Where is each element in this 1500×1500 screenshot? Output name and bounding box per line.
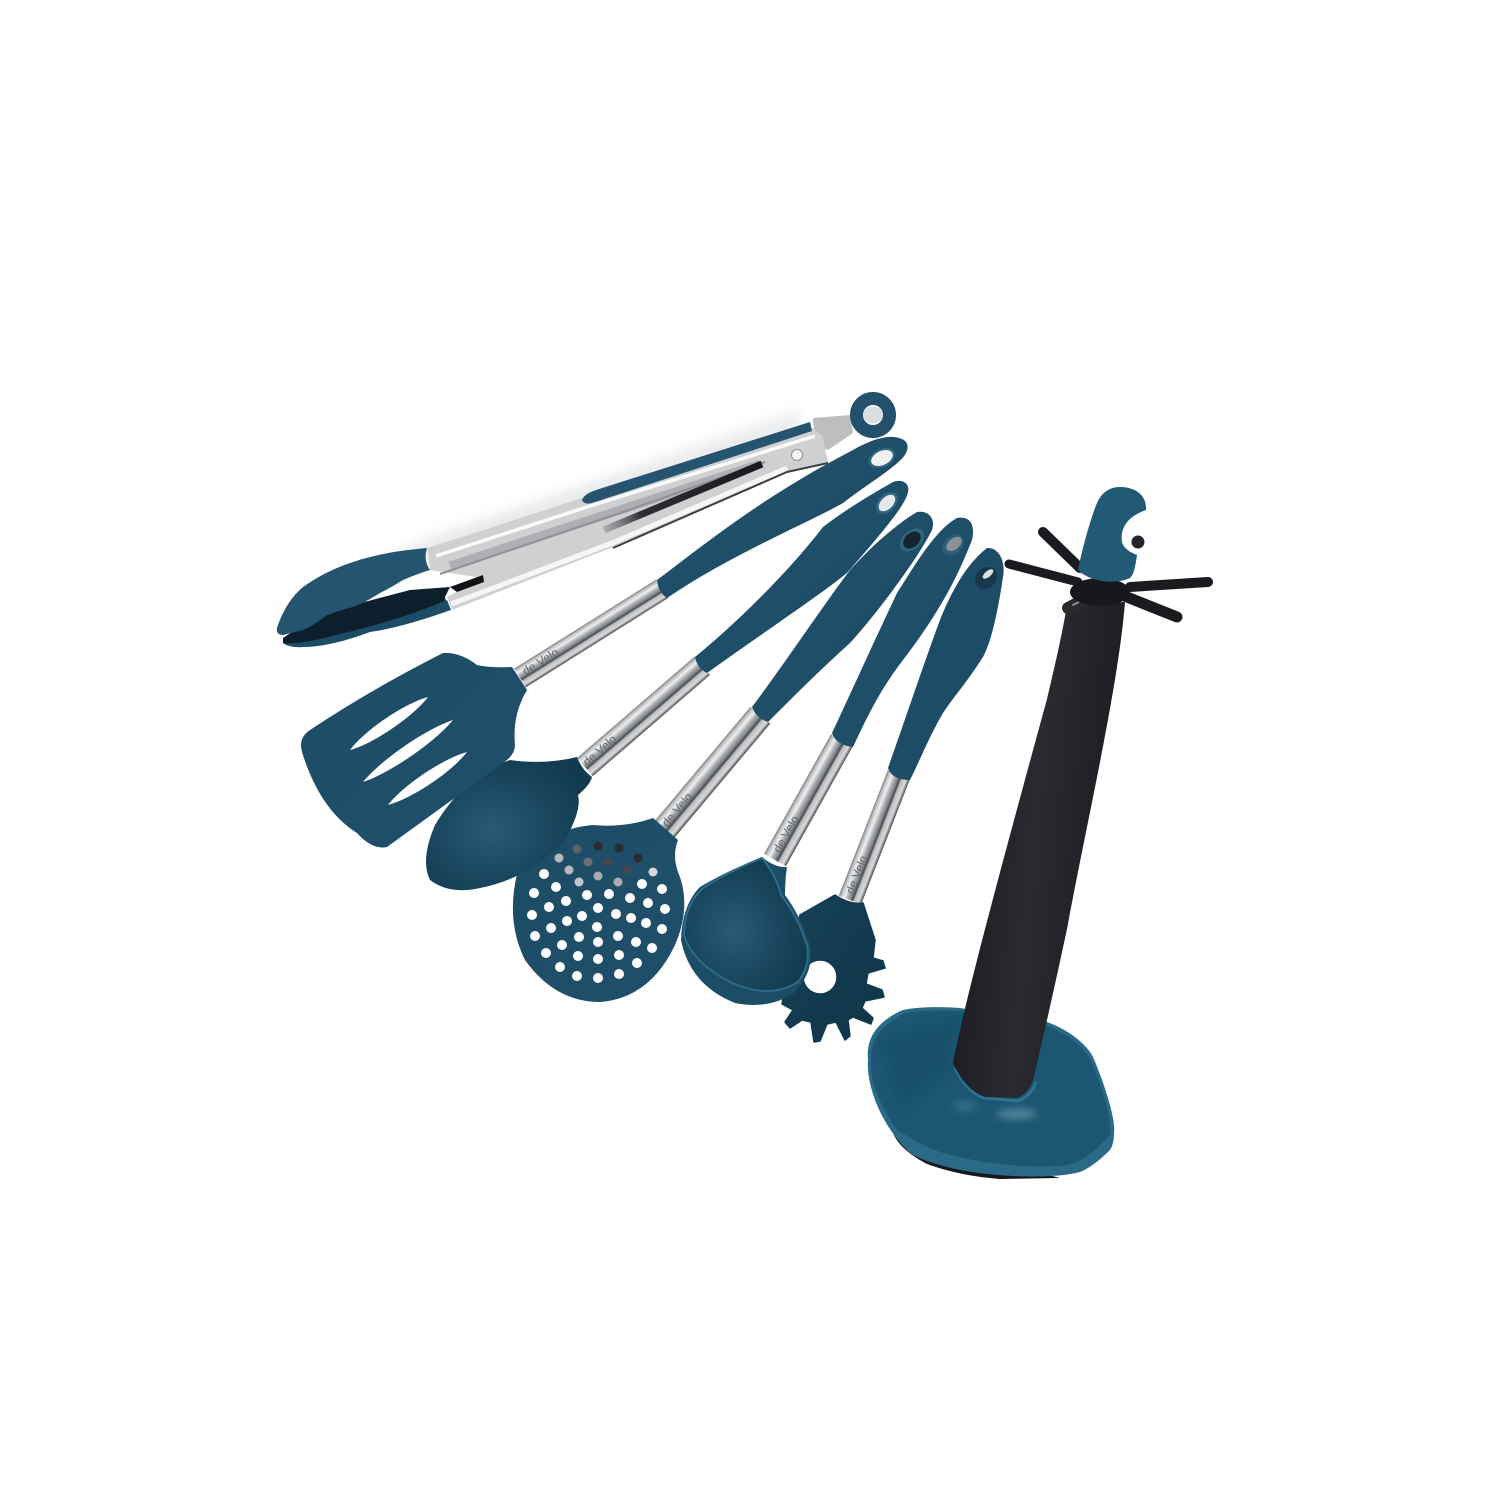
spoon head: [426, 757, 592, 890]
tongs inner gap: [450, 575, 484, 592]
tongs grip: [582, 422, 812, 504]
ladle steel shaft: de Velo: [770, 813, 802, 855]
teal cap: [1078, 487, 1146, 582]
spoon: [426, 481, 908, 890]
spoon steel shaft: de Velo: [580, 732, 620, 769]
tongs lower silicone tip: [283, 587, 450, 647]
pasta server: [782, 548, 1004, 1042]
stand base: [868, 1007, 1114, 1176]
tongs steel body: [428, 428, 828, 610]
pasta server head with teeth: [782, 895, 885, 1042]
hook detail: [1132, 536, 1144, 548]
skimmer handle: [752, 512, 933, 722]
ladle steel shaft: [764, 734, 853, 866]
peg arms: [1009, 532, 1208, 617]
soup ladle: [681, 518, 973, 1005]
spoon handle: [695, 481, 908, 673]
base tray surface: [871, 1010, 1110, 1167]
tongs steel highlights: [436, 436, 828, 604]
skimmer steel shaft: de Velo: [659, 790, 696, 830]
tongs back lock plate: [813, 415, 853, 450]
skimmer head: [513, 818, 684, 1002]
black pole: [953, 602, 1125, 1098]
stand base underside: [893, 1133, 1060, 1179]
skimmer with perforated head: [513, 512, 933, 1002]
spoon steel shaft: [577, 657, 710, 776]
pole base ring: [955, 1068, 1036, 1101]
pasta server handle: [888, 548, 1004, 780]
pasta server steel shaft: [839, 770, 910, 904]
turner steel shaft: [514, 579, 668, 687]
ladle handle: [832, 518, 973, 747]
skimmer steel shaft: [654, 707, 770, 838]
utensil stand: [868, 487, 1208, 1179]
peg hub: [1070, 578, 1130, 606]
skimmer holes: [527, 842, 670, 983]
soft shadows: [272, 412, 800, 620]
locking tongs: [277, 398, 890, 647]
turner handle: [657, 437, 908, 598]
tongs upper silicone tip: [277, 548, 430, 635]
turner steel shaft: de Velo: [520, 645, 561, 678]
slotted turner: [301, 437, 908, 847]
pasta server steel shaft: de Velo: [843, 853, 871, 896]
tongs hinge: [792, 450, 802, 460]
tongs lock ring: [856, 398, 890, 432]
ladle head: [681, 857, 811, 1005]
base collar highlights: [880, 1015, 1037, 1119]
turner head with slots: [301, 653, 527, 847]
